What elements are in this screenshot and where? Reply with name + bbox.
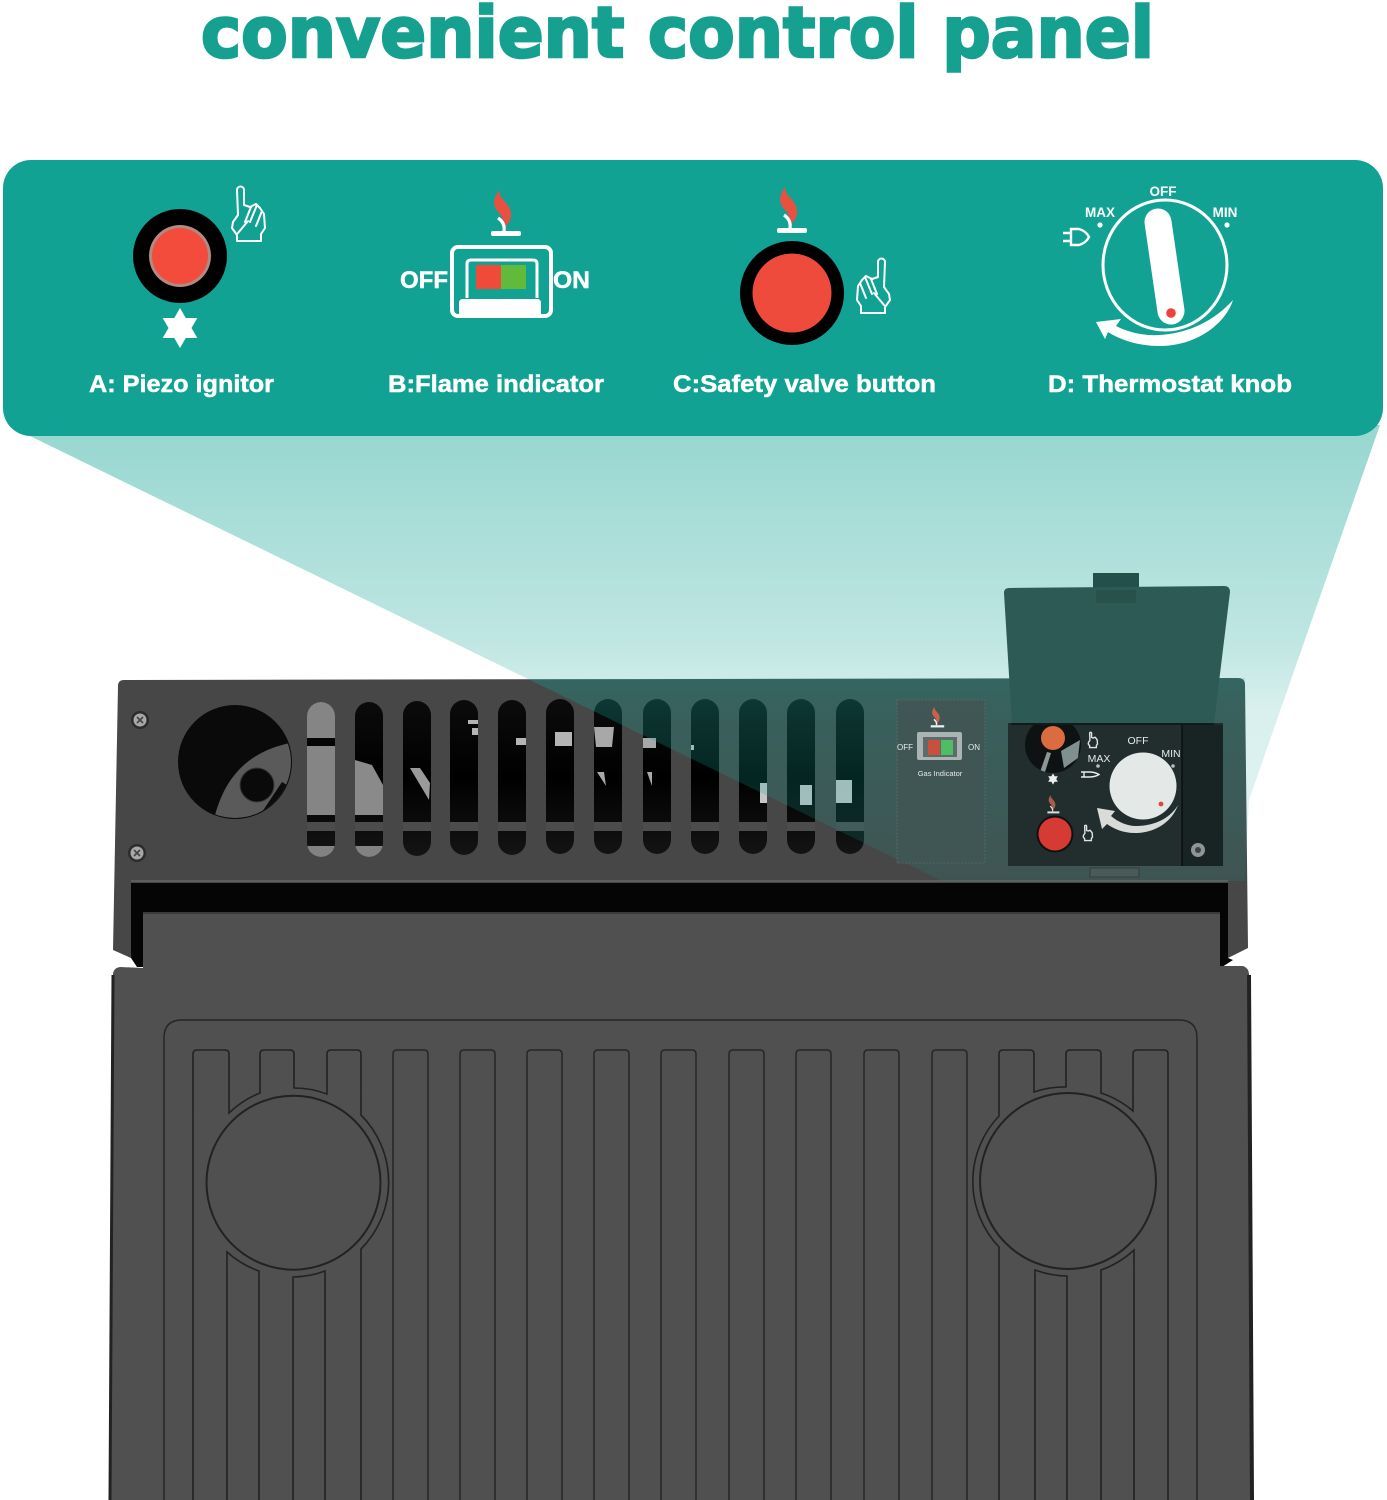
MAX mark: MAX	[1085, 205, 1115, 220]
left circular recess	[193, 1050, 389, 1500]
OFF label: OFF	[897, 743, 913, 752]
MAX text: MAX	[1088, 753, 1110, 765]
thermostat knob	[1110, 752, 1176, 820]
icon: indicator switch	[452, 247, 551, 316]
legend C: safety valve button	[673, 187, 936, 398]
small hand upper	[1088, 732, 1097, 748]
gas indicator caption: Gas Indicator	[918, 769, 963, 778]
burner vent hole	[178, 705, 295, 820]
gas indicator plate	[897, 700, 985, 863]
spark star	[1048, 773, 1058, 785]
box screw	[1191, 843, 1205, 857]
red safety button	[1036, 816, 1074, 852]
OFF label: OFF	[400, 267, 448, 294]
teal legend panel	[3, 160, 1383, 436]
knob red dot	[1159, 802, 1163, 806]
fan parts seen through the slots	[307, 702, 335, 815]
legend B: flame indicator	[388, 190, 604, 398]
ON label: ON	[968, 743, 980, 752]
icon: small flame	[931, 707, 944, 727]
vent slots	[300, 695, 870, 860]
legend A: piezo ignitor	[89, 187, 274, 398]
OFF mark: OFF	[1150, 184, 1176, 199]
indicator switch	[917, 732, 962, 760]
dial dots	[1096, 764, 1175, 768]
icon: pressing hand	[857, 258, 890, 313]
right circular recess	[973, 1050, 1168, 1500]
label C: C:Safety valve button	[673, 371, 936, 398]
hinged lid	[1004, 573, 1230, 724]
control box	[1008, 717, 1223, 877]
straight ribs	[393, 1050, 967, 1500]
teal projection beam	[30, 425, 1380, 881]
MIN mark: MIN	[1213, 205, 1237, 220]
icon: pressing hand	[232, 187, 265, 241]
MIN text: MIN	[1161, 748, 1181, 760]
icon: knob dial	[1103, 200, 1227, 330]
icon: flame	[777, 187, 807, 233]
rotation arrow	[1097, 805, 1178, 833]
teal tint on housing	[528, 678, 1247, 881]
upper housing	[113, 678, 1248, 958]
screw: lower	[128, 844, 146, 862]
icon: spark star	[163, 308, 197, 348]
small flame	[1047, 795, 1059, 813]
small plug	[1081, 772, 1099, 777]
screw: upper	[131, 711, 149, 729]
small hand lower	[1083, 825, 1092, 841]
legend D: thermostat knob	[1048, 184, 1292, 398]
icon: flame	[491, 190, 521, 236]
label B: B:Flame indicator	[388, 371, 604, 398]
icon: rotation arrow	[1096, 300, 1233, 346]
label D: D: Thermostat knob	[1048, 371, 1292, 398]
lid tab	[1093, 573, 1139, 589]
icon: ignitor button	[133, 209, 227, 303]
ON label: ON	[553, 267, 590, 294]
ignitor dome and button	[1025, 725, 1081, 773]
black recess behind the plate	[131, 883, 1233, 967]
label A: A: Piezo ignitor	[89, 371, 274, 398]
fridge body and vent housing	[110, 678, 1252, 1500]
dial marks	[1097, 222, 1230, 228]
icon: plug	[1063, 229, 1089, 245]
OFF text: OFF	[1128, 735, 1148, 747]
lower plate	[110, 912, 1252, 1500]
embossed plate outline	[164, 1020, 1197, 1500]
icon: valve button	[740, 241, 844, 345]
